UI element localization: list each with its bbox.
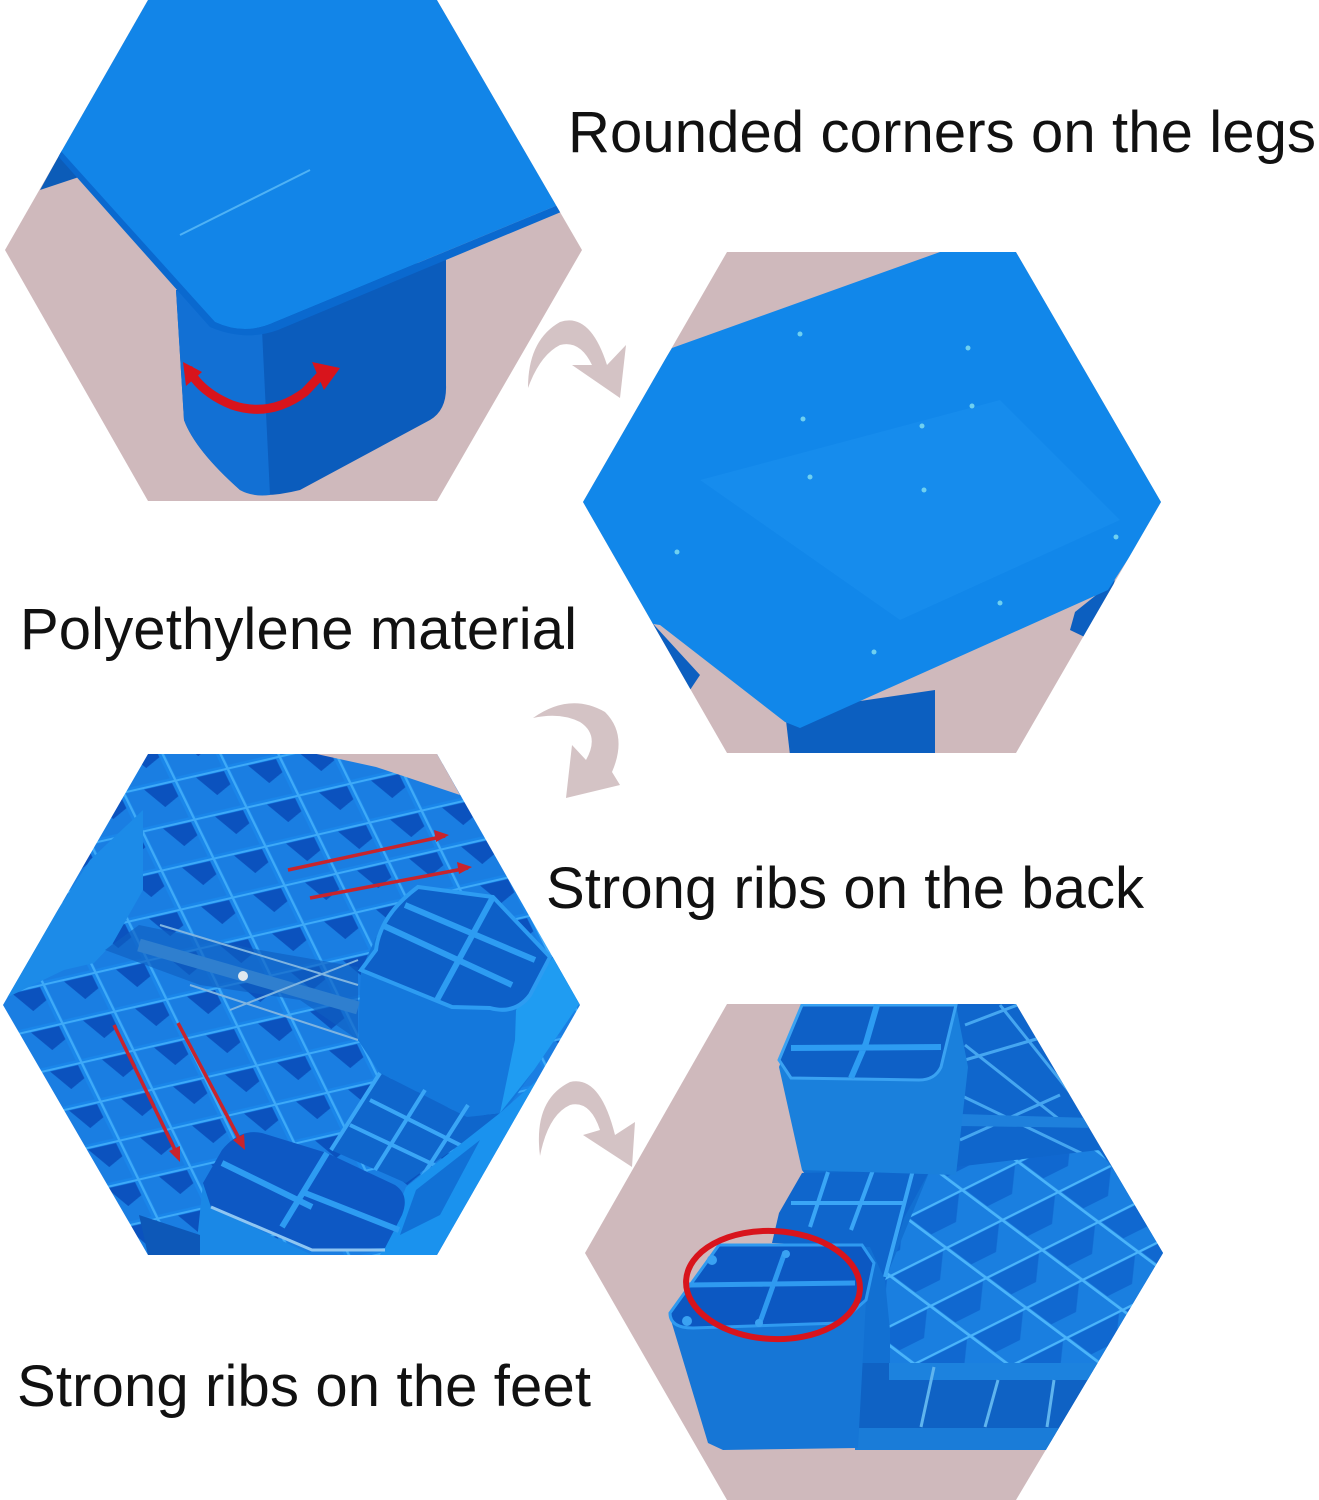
table top: [575, 252, 1165, 728]
blue backing behind lattice and feet: [802, 1160, 1170, 1450]
far leg shadow: [40, 150, 78, 190]
panel: rounded corners photo: [0, 0, 590, 505]
panel: feet ribs photo: [580, 1000, 1175, 1500]
lower foot: [670, 1245, 874, 1450]
arrow: first to second: [528, 320, 626, 398]
panel: back ribs photo: [0, 750, 585, 1260]
heading: feet ribs: Strong ribs on the feet: [17, 1354, 591, 1419]
red rib arrows: [114, 830, 472, 1162]
upper foot: [779, 1005, 968, 1175]
legs: [645, 580, 1115, 755]
lower left dark bars: [139, 1215, 200, 1255]
icon: red rotation arrow: [183, 362, 340, 409]
panel: polyethylene photo: [575, 250, 1165, 755]
red circle callout: [683, 1227, 863, 1343]
rib lattice: [0, 750, 585, 1260]
plain leg wall: [0, 810, 143, 1000]
heading: rounded corners: Rounded corners on the legs: [568, 100, 1316, 165]
upper right dark lattice: [956, 1004, 1110, 1175]
lower foot: [195, 1132, 405, 1260]
table top: [55, 0, 558, 329]
arrow: second to third: [533, 703, 620, 798]
bottom rail: [855, 1363, 1114, 1450]
recessed middle section: [105, 925, 358, 1040]
heading: polyethylene: Polyethylene material: [20, 597, 577, 662]
lower right grid: [329, 1072, 537, 1255]
upper foot: [358, 887, 582, 1117]
main rib lattice: [885, 1150, 1175, 1365]
small grid between feet: [772, 1170, 930, 1280]
arrow: third to fourth: [539, 1081, 635, 1167]
leg: [176, 260, 446, 495]
dots on surface: [674, 332, 1118, 654]
heading: back ribs: Strong ribs on the back: [546, 856, 1145, 921]
pink corner: [312, 753, 460, 795]
seam: [180, 170, 310, 235]
